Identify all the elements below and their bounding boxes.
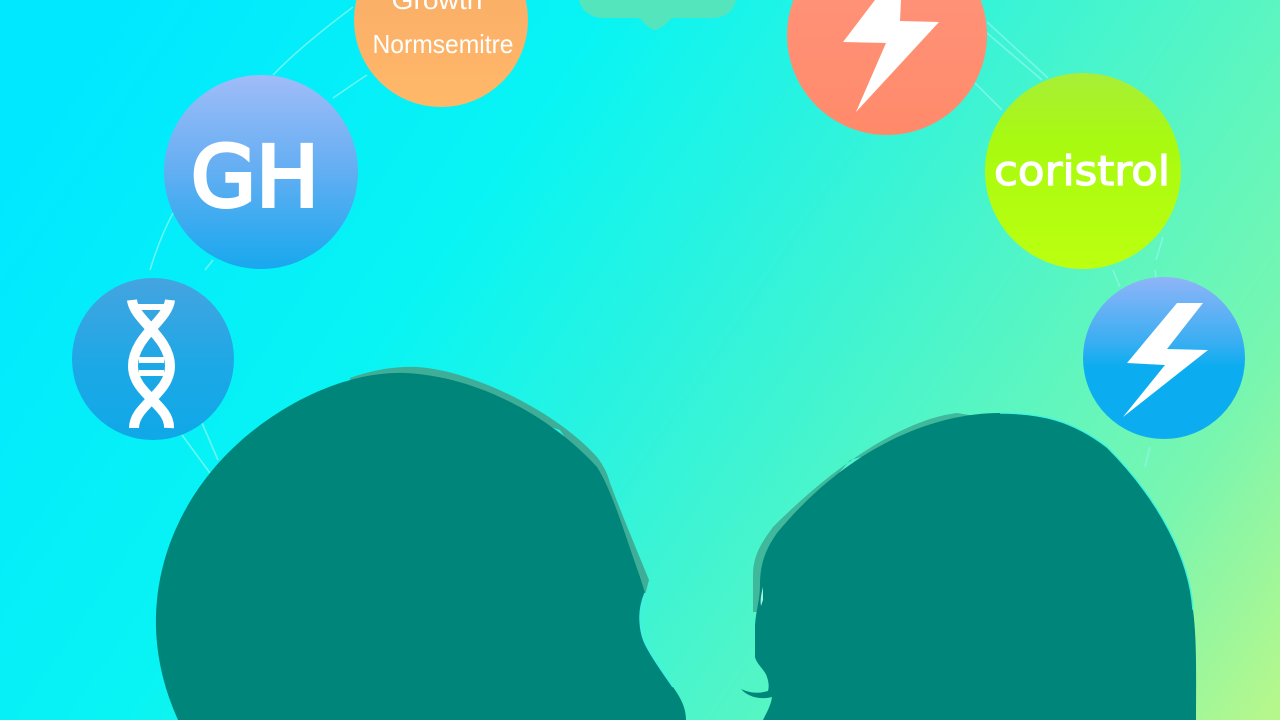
hormone circle: cortisol: [985, 73, 1181, 269]
faint connecting arcs: [150, 7, 1163, 473]
icon: lightning bolt: [1123, 303, 1208, 417]
hormone circle: growth / norepinephrine: [354, 0, 528, 107]
hormone circle: cortisol: coristrol: [994, 147, 1170, 195]
hormone circle: coral with lightning bolt: [787, 0, 987, 135]
right head silhouette: [741, 413, 1196, 720]
hormone circle: GH: [164, 75, 358, 269]
hormone circle: growth / norepinephrine: Normsemitre: [372, 29, 514, 59]
hormone circle: GH: GH: [191, 128, 319, 226]
speech bubble at top centre: [579, 0, 736, 30]
left head silhouette: [156, 367, 686, 720]
icon: lightning bolt: [843, 0, 939, 112]
DNA helix: [132, 300, 170, 428]
hormone circle: blue with lightning bolt: [1083, 277, 1245, 439]
icon: DNA hormone circle: [72, 278, 234, 440]
